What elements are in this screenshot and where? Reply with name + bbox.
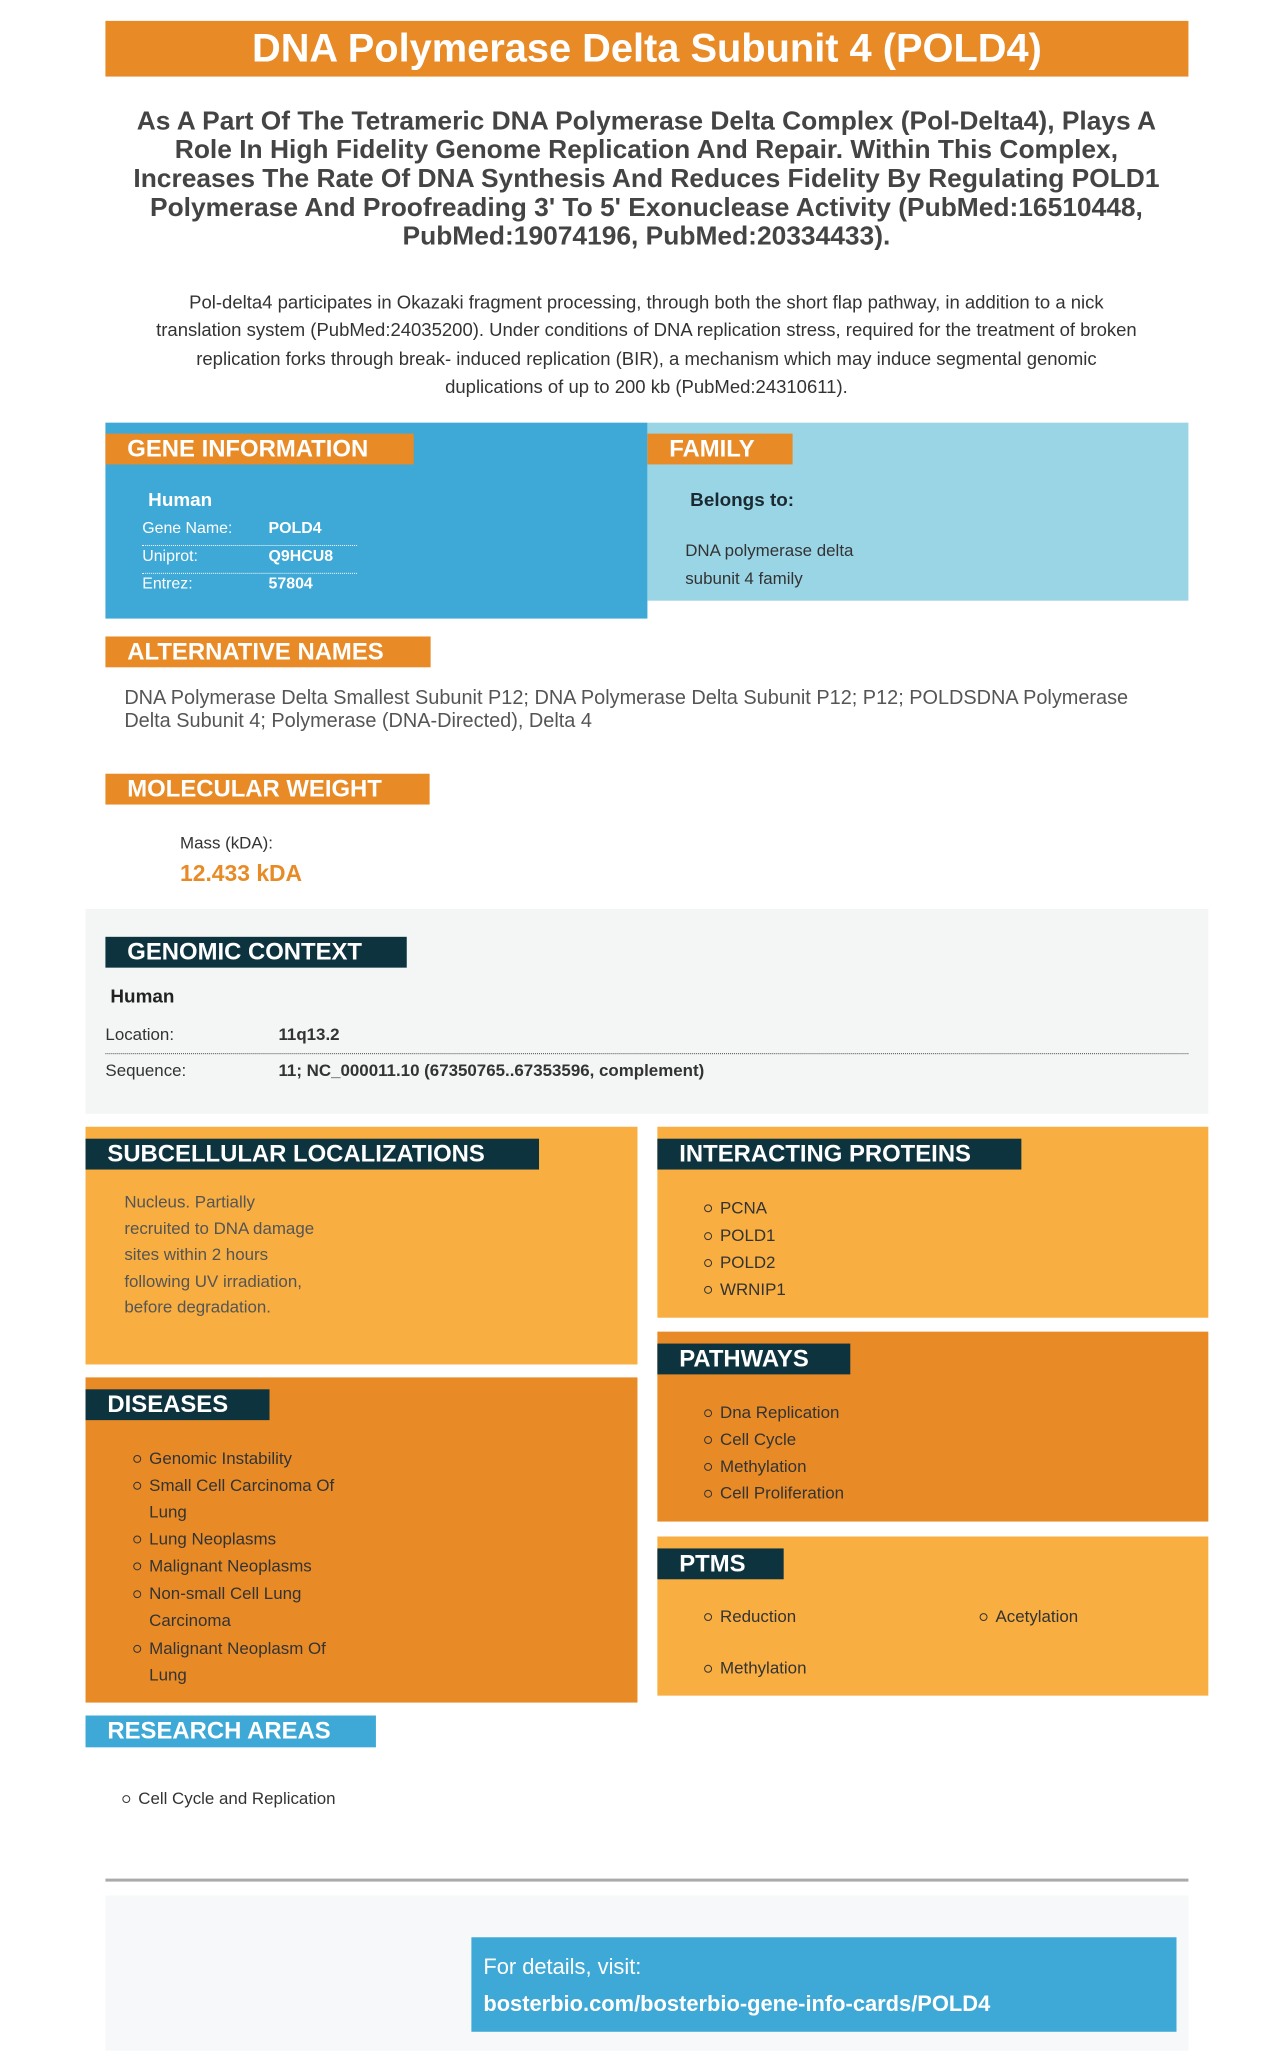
pathway list: Cell Cycle <box>720 1430 796 1449</box>
localization text: Nucleus. Partially <box>124 1192 255 1211</box>
ptm list: Acetylation <box>995 1607 1078 1626</box>
header: research areas: RESEARCH AREAS <box>107 1718 331 1744</box>
link box: For details, visit: <box>483 1954 641 1979</box>
link box: bosterbio.com/bosterbio-gene-info-cards/POLD4 <box>483 1991 990 2016</box>
ptm list: Reduction <box>720 1607 796 1626</box>
gene fields: POLD4 <box>269 520 322 537</box>
header: family: FAMILY <box>669 436 755 462</box>
panel: pathways <box>657 1332 1208 1522</box>
location row: Location: <box>105 1025 174 1044</box>
pathway list <box>704 1403 844 1503</box>
ptm list: Methylation <box>720 1659 806 1678</box>
link box <box>471 1937 1176 2032</box>
disease list: Lung Neoplasms <box>149 1530 276 1548</box>
location row: 11q13.2 <box>278 1025 340 1044</box>
summary heading <box>133 105 1159 251</box>
gene fields: Q9HCU8 <box>269 548 333 565</box>
description paragraph <box>156 291 1137 397</box>
disease list: Small Cell Carcinoma Of <box>149 1476 334 1495</box>
summary heading: Increases The Rate Of DNA Synthesis And Reduces Fidelity By Regulating POLD1 <box>133 163 1159 193</box>
species label: Human <box>148 490 212 511</box>
footer panel <box>105 1896 1188 2051</box>
summary heading: As A Part Of The Tetrameric DNA Polymerase Delta Complex (Pol-Delta4), Plays A <box>137 105 1156 135</box>
header: genomic context <box>105 937 407 968</box>
header: gene information <box>105 434 414 464</box>
title bar <box>105 21 1188 77</box>
title bar: DNA Polymerase Delta Subunit 4 (POLD4) <box>252 27 1042 71</box>
disease list: Malignant Neoplasms <box>149 1556 312 1575</box>
protein list <box>704 1198 786 1299</box>
alternative names text <box>124 687 1128 732</box>
panel: ptms <box>657 1537 1208 1696</box>
pathway list: Cell Proliferation <box>720 1484 844 1503</box>
gene fields: 57804 <box>269 576 313 593</box>
summary heading: PubMed:19074196, PubMed:20334433). <box>403 221 890 251</box>
protein list: POLD1 <box>720 1226 775 1245</box>
disease list: Genomic Instability <box>149 1449 292 1468</box>
gene fields: Uniprot: <box>142 548 198 565</box>
header: gene information: GENE INFORMATION <box>127 436 368 462</box>
summary heading: Role In High Fidelity Genome Replication And Repair. Within This Complex, <box>175 134 1118 164</box>
panel: subcellular localizations <box>86 1127 637 1364</box>
header: interacting proteins: INTERACTING PROTEINS <box>679 1141 971 1168</box>
header: family <box>647 434 793 464</box>
panel: gene information <box>105 423 647 619</box>
research list: Cell Cycle and Replication <box>138 1789 336 1808</box>
localization text <box>124 1192 314 1317</box>
disease list: Lung <box>149 1666 187 1685</box>
header: alternative names <box>105 636 431 667</box>
panel: family <box>647 423 1188 601</box>
protein list: POLD2 <box>720 1253 775 1272</box>
description paragraph: replication forks through break- induced replication (BIR), a mechanism which may induce segmental genomic <box>196 348 1097 369</box>
sequence row: Sequence: <box>105 1061 186 1080</box>
protein list: WRNIP1 <box>720 1280 786 1299</box>
pathway list: Dna Replication <box>720 1403 839 1422</box>
family text <box>685 541 854 588</box>
disease list: Carcinoma <box>149 1611 231 1630</box>
alternative names text: DNA Polymerase Delta Smallest Subunit P12; DNA Polymerase Delta Subunit P12; P12; POLDSDNA Polymerase <box>124 687 1128 709</box>
header: molecular weight <box>105 774 430 805</box>
localization text: following UV irradiation, <box>124 1272 302 1291</box>
header: research areas <box>86 1716 376 1747</box>
description paragraph: duplications of up to 200 kb (PubMed:24310611). <box>445 376 848 397</box>
header: pathways <box>657 1344 850 1374</box>
belongs to: Belongs to: <box>690 490 794 511</box>
header: diseases: DISEASES <box>107 1391 228 1418</box>
localization text: before degradation. <box>124 1298 271 1317</box>
ptm list <box>704 1607 1078 1678</box>
gene fields <box>142 520 358 593</box>
header: ptms: PTMS <box>679 1550 746 1577</box>
gene fields: Gene Name: <box>142 520 232 537</box>
pathway list: Methylation <box>720 1457 806 1476</box>
disease list: Malignant Neoplasm Of <box>149 1639 326 1658</box>
panel: genomic context <box>86 909 1208 1114</box>
mass: 12.433 kDA <box>180 860 302 886</box>
disease list: Lung <box>149 1503 187 1522</box>
header: pathways: PATHWAYS <box>679 1346 809 1372</box>
header: alternative names: ALTERNATIVE NAMES <box>127 638 384 665</box>
header: molecular weight: MOLECULAR WEIGHT <box>127 776 382 803</box>
disease list: Non-small Cell Lung <box>149 1584 301 1603</box>
localization text: sites within 2 hours <box>124 1245 268 1264</box>
panel: diseases <box>86 1377 637 1703</box>
mass: Mass (kDA): <box>180 833 273 852</box>
species: Human <box>110 987 174 1007</box>
description paragraph: Pol-delta4 participates in Okazaki fragment processing, through both the short flap pathway, in addition to a nick <box>189 291 1104 312</box>
summary heading: Polymerase And Proofreading 3' To 5' Exonuclease Activity (PubMed:16510448, <box>150 192 1143 222</box>
header: ptms <box>657 1548 784 1579</box>
sequence row: 11; NC_000011.10 (67350765..67353596, complement) <box>278 1061 704 1080</box>
description paragraph: translation system (PubMed:24035200). Under conditions of DNA replication stress, required for the treatment of broken <box>156 320 1137 340</box>
header: diseases <box>86 1389 270 1420</box>
mass <box>180 833 302 886</box>
location row <box>105 1025 1188 1054</box>
protein list: PCNA <box>720 1198 767 1217</box>
family text: DNA polymerase delta <box>685 541 853 560</box>
disease list <box>133 1449 334 1685</box>
alternative names text: Delta Subunit 4; Polymerase (DNA-Directed), Delta 4 <box>124 710 592 732</box>
gene fields: Entrez: <box>142 576 193 593</box>
family text: subunit 4 family <box>685 569 803 588</box>
header: subcellular: SUBCELLULAR LOCALIZATIONS <box>107 1141 485 1168</box>
header: genomic context: GENOMIC CONTEXT <box>127 939 362 966</box>
header: interacting proteins <box>657 1139 1021 1170</box>
panel: interacting proteins <box>657 1127 1208 1318</box>
localization text: recruited to DNA damage <box>124 1219 314 1238</box>
